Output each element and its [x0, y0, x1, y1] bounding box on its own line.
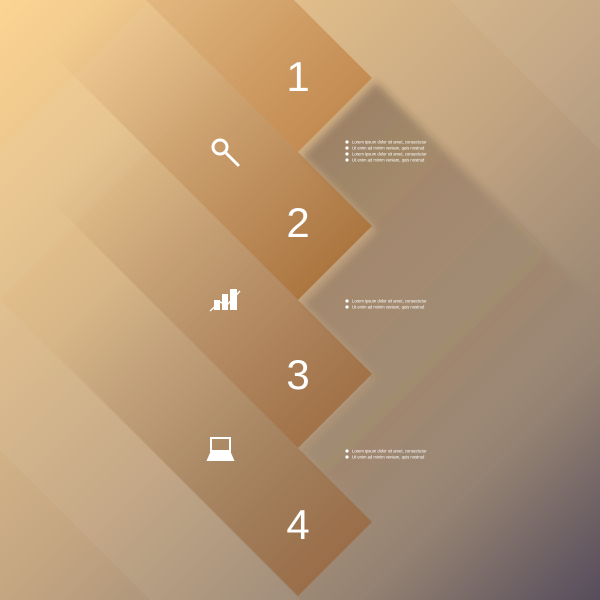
icon: magnifier: [213, 140, 238, 165]
number 2: 2: [286, 199, 310, 246]
text block 3: [345, 448, 427, 460]
text block 2: Ut enim ad minim veniam, quis nostrud: [352, 304, 425, 310]
text block 2: [345, 298, 427, 310]
segment 2: [0, 0, 372, 300]
text block 1: Lorem ipsum dolor sit amet, consectetur: [352, 152, 427, 156]
segment 3: [0, 0, 372, 448]
text block 1: Ut enim ad minim veniam, quis nostrud: [352, 146, 425, 150]
text block 1: Ut enim ad minim veniam, quis nostrud: [352, 158, 425, 162]
text block 1: [345, 140, 427, 162]
icon: bar chart: [210, 289, 240, 311]
segment 4: [0, 0, 372, 596]
shadows: [302, 82, 594, 600]
icon: laptop: [208, 438, 233, 460]
segment 1: [0, 0, 372, 152]
number 4: 4: [286, 501, 310, 548]
text block 1: Lorem ipsum dolor sit amet, consectetur: [352, 140, 427, 144]
number 3: 3: [286, 351, 310, 398]
number 1: 1: [286, 53, 310, 100]
text block 2: Lorem ipsum dolor sit amet, consectetur: [352, 298, 427, 304]
text block 3: Lorem ipsum dolor sit amet, consectetur: [352, 448, 427, 454]
text block 3: Ut enim ad minim veniam, quis nostrud: [352, 454, 425, 460]
